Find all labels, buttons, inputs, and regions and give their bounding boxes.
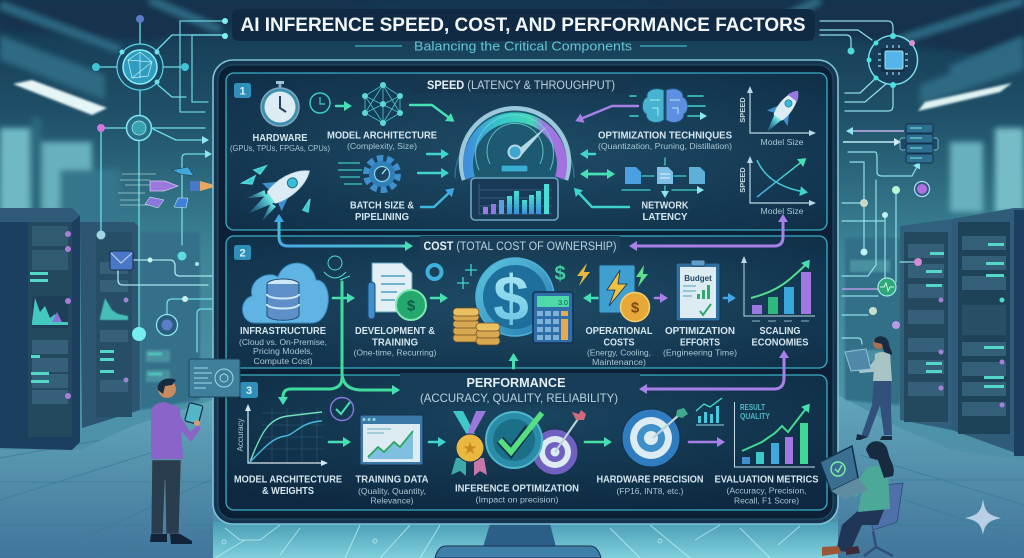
label: batch size and pipelining: BATCH SIZE & — [350, 200, 414, 212]
person: man with tablet — [150, 378, 203, 544]
panel: cost — [226, 236, 827, 368]
icon: energy tablet and coin: $ — [631, 300, 640, 316]
label: evaluation metrics: (Accuracy, Precision, — [726, 486, 806, 496]
heading: speed: SPEED (LATENCY & THROUGHPUT) — [427, 80, 615, 92]
label: optimization efforts — [663, 325, 737, 358]
icon: neural network — [362, 82, 403, 126]
server rack left 1 — [0, 208, 80, 450]
ceiling lamp right — [918, 83, 1012, 111]
chart: speed vs model size 1 — [738, 83, 816, 147]
label: model architecture: (Complexity, Size) — [347, 141, 417, 151]
server rack right 2 — [900, 219, 952, 430]
label: hardware precision: (FP16, INT8, etc.) — [616, 486, 684, 496]
label: scaling economies — [752, 325, 808, 348]
panel: speed — [226, 73, 827, 230]
label: evaluation metrics: EVALUATION METRICS — [714, 474, 818, 486]
icon: small clock — [310, 93, 330, 113]
arrow: accuracy to training — [329, 441, 348, 443]
label: model architecture and weights — [234, 474, 342, 497]
connector arrows: speed to cost — [274, 214, 788, 246]
heading: performance: (ACCURACY, QUALITY, RELIABILITY) — [420, 391, 618, 405]
label: operational costs: OPERATIONAL — [586, 325, 653, 337]
label: inference optimization: (Impact on precision) — [476, 494, 559, 504]
icon: globe node — [92, 15, 189, 90]
label: training data — [356, 474, 429, 506]
connector arrows: cost to performance — [283, 282, 789, 402]
arrow: inference to hardware — [585, 441, 609, 443]
panel: performance — [226, 373, 827, 510]
chart: speed vs model size 1: SPEED — [738, 97, 747, 123]
heading: performance: PERFORMANCE — [466, 375, 566, 390]
label: inference optimization — [455, 482, 579, 504]
arrow: training to inference — [429, 441, 443, 443]
icon: calculator: 3.0 — [558, 300, 568, 307]
label: development and training — [354, 325, 437, 358]
heading: cost — [420, 236, 620, 255]
title banner: AI INFERENCE SPEED, COST, AND PERFORMANCE FACTORS — [240, 14, 806, 36]
chart: speed vs model size 2: Model Size — [760, 206, 804, 216]
label: training data: (Quality, Quantity, — [358, 486, 426, 496]
icon: cloud database — [243, 263, 328, 323]
bar chart in gauge — [471, 178, 558, 220]
icon: document and coin: $ — [407, 298, 416, 314]
server rack left 2 — [80, 222, 140, 428]
icon: gear — [338, 159, 397, 189]
label: network latency — [642, 200, 689, 223]
chart: accuracy — [236, 404, 328, 466]
label: development and training: (One-time, Recurring) — [354, 348, 437, 358]
chart: result quality: RESULT — [740, 402, 766, 412]
label: batch size and pipelining — [350, 200, 414, 223]
label: training data: TRAINING DATA — [356, 474, 429, 486]
circuit network left — [92, 15, 228, 352]
label: hardware precision — [596, 474, 704, 496]
label: model architecture and weights: MODEL ARCHITECTURE — [234, 474, 342, 486]
label: operational costs — [586, 325, 653, 367]
icon: dollar and bolt: $ — [554, 263, 566, 285]
badge 1 — [234, 83, 251, 98]
icon: headset outline — [324, 256, 350, 280]
label: infrastructure: Pricing Models, — [253, 346, 313, 356]
person: woman with laptop standing — [845, 336, 892, 440]
label: evaluation metrics — [714, 474, 818, 506]
icon: medal: ★ — [462, 439, 478, 458]
label: hardware — [230, 132, 330, 153]
icon: rocket — [239, 157, 319, 227]
label: optimization efforts: OPTIMIZATION — [665, 325, 735, 337]
label: evaluation metrics: Recall, F1 Score) — [734, 496, 799, 506]
arrow: infrastructure to development — [333, 297, 352, 299]
person: woman with laptop seated — [820, 441, 903, 556]
badge 3 — [240, 382, 258, 398]
label: model architecture: MODEL ARCHITECTURE — [327, 130, 437, 142]
arrows into gauge left — [410, 105, 452, 207]
server rack right far — [845, 238, 900, 405]
monitor: stand — [435, 524, 601, 558]
icon: dollar and bolt — [554, 263, 590, 286]
icon: stopwatch — [261, 81, 299, 126]
icon: status nodes — [860, 182, 930, 329]
arrow: clock to network — [336, 105, 349, 107]
title banner — [232, 9, 815, 41]
label: development and training: DEVELOPMENT & — [355, 325, 435, 337]
label: operational costs: (Energy, Cooling, — [587, 348, 651, 358]
ceiling lamp left — [13, 80, 107, 115]
icon: budget clipboard — [676, 260, 720, 321]
arrow: operational costs to coin — [586, 297, 599, 299]
icon: documents — [622, 158, 705, 194]
arrows into gauge right — [576, 106, 638, 207]
chart: speed vs model size 2 — [738, 156, 816, 216]
badge 2 — [234, 245, 251, 260]
icon: dollar coin — [476, 258, 554, 336]
circuit network right — [820, 21, 938, 344]
heading: speed — [411, 75, 629, 93]
subtitle: Balancing the Critical Components — [414, 38, 633, 54]
label: infrastructure: (Cloud vs. On-Premise, — [239, 337, 327, 347]
floor circuit traces under monitor — [213, 522, 838, 558]
floor — [0, 395, 1024, 558]
icon: coin stacks — [453, 308, 500, 345]
label: operational costs: Maintenance) — [592, 357, 646, 367]
icon: chip node — [848, 33, 918, 88]
floating dashboard screen — [189, 359, 240, 397]
label: optimization techniques — [598, 130, 732, 151]
label: scaling economies: SCALING — [760, 325, 800, 337]
icon: dollar coin: $ — [493, 262, 529, 334]
arrow: development to coin — [431, 297, 445, 299]
label: network latency: LATENCY — [642, 211, 688, 223]
label: development and training: TRAINING — [372, 336, 418, 348]
icon: browser chart — [360, 415, 423, 465]
arrow: performance up to cost — [512, 356, 515, 368]
label: hardware: (GPUs, TPUs, FPGAs, CPUs) — [230, 143, 330, 153]
chart: result quality: QUALITY — [740, 411, 770, 421]
icon: sparkle — [965, 499, 1001, 535]
icon: check circle — [330, 398, 354, 420]
icon: sparkles — [457, 264, 477, 289]
badge 3: 3 — [246, 385, 252, 397]
chart: accuracy: Accuracy — [236, 419, 245, 451]
badge 2: 2 — [239, 248, 246, 260]
chart: scaling economies — [741, 256, 815, 321]
label: infrastructure: INFRASTRUCTURE — [240, 325, 326, 337]
label: optimization efforts: (Engineering Time) — [663, 348, 737, 358]
label: hardware precision: HARDWARE PRECISION — [596, 474, 704, 486]
icon: envelope — [110, 251, 133, 270]
icon: budget clipboard: Budget — [684, 274, 712, 283]
icon: document and coin — [368, 263, 426, 320]
label: infrastructure — [239, 325, 327, 366]
badge 1: 1 — [239, 86, 246, 98]
label: model architecture — [327, 130, 437, 151]
server rack right 1 — [952, 208, 1024, 456]
icon: speed streaks and shards — [242, 166, 310, 212]
label: scaling economies: ECONOMIES — [752, 336, 808, 348]
chart: result quality — [734, 402, 815, 467]
arrow: optimization to scaling — [724, 297, 733, 299]
label: network latency: NETWORK — [642, 200, 689, 212]
label: batch size and pipelining: PIPELINING — [355, 211, 409, 223]
label: operational costs: COSTS — [604, 336, 634, 348]
label: optimization techniques: OPTIMIZATION TECHNIQUES — [598, 130, 732, 142]
icon: speed dial node — [156, 314, 178, 336]
icon: calculator — [533, 292, 573, 343]
arrow: operational to optimization — [655, 297, 665, 299]
label: hardware: HARDWARE — [252, 132, 308, 144]
label: model architecture and weights: & WEIGHTS — [262, 485, 314, 497]
icon: target small — [532, 410, 586, 475]
label: training data: Relevance) — [370, 496, 414, 506]
label: optimization efforts: EFFORTS — [680, 336, 720, 348]
icon: brain — [642, 89, 688, 122]
icon: small gear — [428, 265, 442, 279]
arrow: hardware to evaluation — [689, 441, 722, 443]
chart: speed vs model size 2: SPEED — [738, 167, 747, 193]
heading: cost: COST (TOTAL COST OF OWNERSHIP) — [424, 241, 617, 253]
chart: speed vs model size 1: Model Size — [760, 137, 804, 147]
label: infrastructure: Compute Cost) — [254, 356, 313, 366]
monitor bezel — [213, 60, 838, 524]
icon: target big — [622, 408, 688, 467]
gauge — [455, 108, 574, 220]
label: optimization techniques: (Quantization, Pruning, Distillation) — [598, 141, 732, 151]
icon: brain side arrows — [630, 96, 705, 116]
icon: big check circle — [486, 412, 542, 468]
icon: medal — [451, 411, 487, 476]
server rack left 3 — [140, 232, 200, 410]
icon: flying paper shards — [118, 167, 218, 208]
icon: energy tablet and coin — [599, 265, 650, 322]
heading: performance — [400, 373, 640, 405]
icon: small node — [96, 18, 228, 341]
label: inference optimization: INFERENCE OPTIMIZATION — [455, 482, 579, 494]
icon: server stack — [900, 124, 938, 163]
icon: mini chart — [696, 398, 724, 425]
